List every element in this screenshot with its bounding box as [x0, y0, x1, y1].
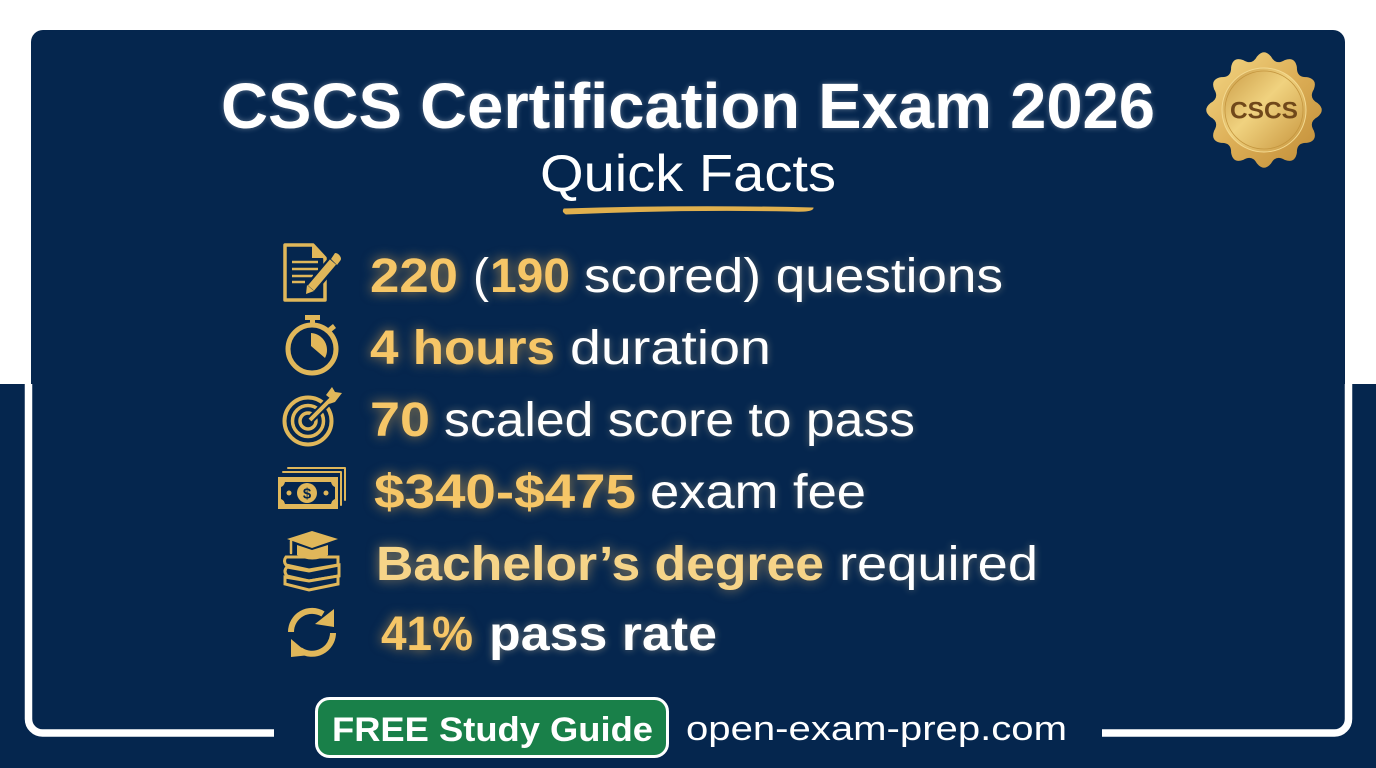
- subtitle underline: [563, 207, 813, 214]
- text: passing score: 70: [370, 394, 430, 447]
- text: pass rate: pass rate: [489, 608, 717, 661]
- website link: open-exam-prep.com: [686, 710, 1067, 748]
- text: questions: scored) questions: [584, 250, 1003, 303]
- text: questions: [370, 250, 1003, 303]
- text: exam fee: $340-$475: [374, 466, 636, 519]
- text: degree requirement: [376, 538, 1038, 591]
- text: questions: 190: [490, 250, 570, 303]
- text: exam fee: exam fee: [650, 466, 866, 519]
- icon: stack of money: $: [303, 486, 312, 502]
- text: duration: 4 hours: [370, 322, 555, 375]
- text: pass rate: [381, 608, 717, 661]
- title: CSCS Certification Exam 2026: [221, 70, 1155, 142]
- white frame: right section: [1102, 384, 1349, 733]
- text: questions: (: [473, 250, 489, 303]
- button: free study guide: FREE Study Guide: [332, 711, 653, 749]
- lower background band: [0, 384, 1376, 768]
- icon: stopwatch: [288, 315, 336, 373]
- button: free study guide: [316, 698, 668, 756]
- text: passing score: scaled score to pass: [444, 394, 915, 447]
- text: duration: duration: [570, 322, 771, 375]
- badge: CSCS gold seal: [1206, 52, 1322, 168]
- white frame: left section: [28, 384, 274, 733]
- text: exam fee: [374, 466, 866, 519]
- text: duration: [370, 322, 771, 375]
- text: degree requirement: Bachelor’s degree: [376, 538, 824, 591]
- icon: target with arrow: [284, 387, 342, 444]
- subtitle: Quick Facts: [540, 145, 836, 203]
- icon: stack of money: [278, 468, 345, 509]
- icon: books and graduation cap: [284, 531, 339, 590]
- text: questions: 220: [370, 250, 458, 303]
- text: pass rate: 41%: [381, 608, 473, 661]
- badge: CSCS gold seal: CSCS: [1230, 98, 1298, 124]
- icon: circular arrows: [291, 609, 334, 657]
- icon: document and pencil: [285, 245, 341, 300]
- text: degree requirement: required: [839, 538, 1038, 591]
